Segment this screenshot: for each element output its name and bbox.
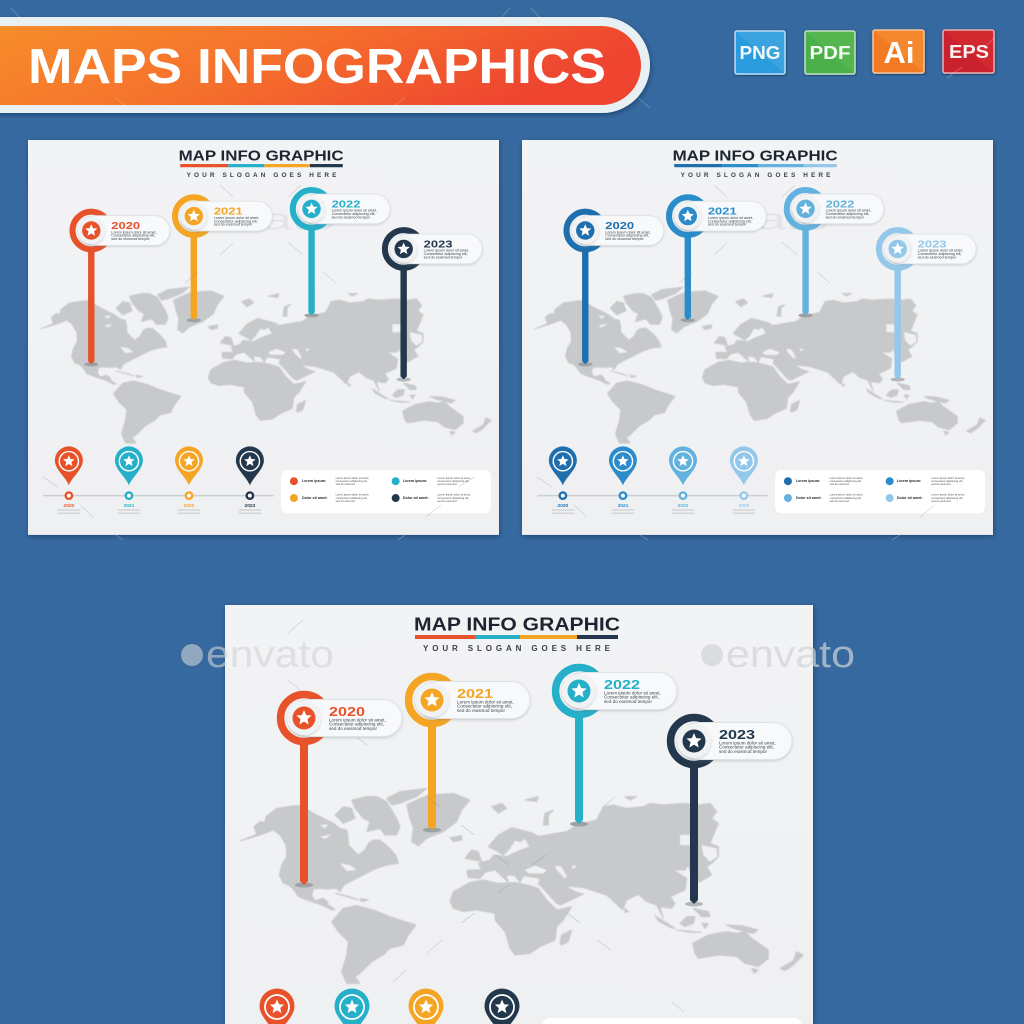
pin 2023 — [385, 230, 482, 382]
legend — [775, 470, 985, 513]
legend: Dolor sit amet: — [897, 496, 923, 500]
pin 2020: Lorem ipsum dolor sit amet, — [111, 230, 157, 234]
pin 2021: Lorem ipsum dolor sit amet, — [214, 216, 259, 220]
pin 2023: sed do eiusmod tempor — [719, 749, 767, 754]
world map — [40, 287, 491, 443]
world map — [240, 788, 803, 983]
pin 2023: 2023 — [424, 239, 453, 250]
legend: sed do eiusmod — [437, 499, 457, 503]
pin 2021: Lorem ipsum dolor sit amet, — [708, 216, 753, 220]
pin 2021: sed do eiusmod tempor — [708, 223, 747, 227]
legend: Lorem ipsum: — [897, 479, 921, 483]
pin 2021 — [175, 197, 272, 322]
legend: sed do eiusmod — [830, 499, 849, 503]
pin 2023: sed do eiusmod tempor — [424, 255, 463, 259]
title banner: MAPS INFOGRAPHICS — [28, 40, 606, 94]
heading — [673, 148, 838, 179]
pin 2023: Lorem ipsum dolor sit amet, — [719, 740, 776, 746]
bottom location pins — [260, 988, 520, 1024]
pin 2020: Consectetur adipiscing elit, — [605, 234, 649, 238]
heading — [414, 614, 620, 653]
pin 2023: 2023 — [719, 727, 755, 742]
pin 2021 — [669, 197, 766, 322]
pin 2021: 2021 — [708, 206, 737, 217]
faint watermark: envato — [673, 203, 830, 237]
pin 2020: 2020 — [605, 221, 634, 232]
pin 2021: sed do eiusmod tempor — [214, 223, 253, 227]
timeline: 2021 — [618, 503, 629, 509]
legend: Lorem ipsum dolor sit amet, — [931, 476, 965, 480]
pin 2023: Lorem ipsum dolor sit amet, — [424, 249, 469, 253]
legend: Dolor sit amet: — [302, 496, 328, 500]
legend: sed do eiusmod — [931, 482, 951, 486]
pin 2022: 2022 — [604, 677, 640, 692]
pin 2021: Consectetur adipiscing elit, — [708, 219, 752, 223]
legend: consectetur adipiscing elit, — [336, 496, 368, 500]
pin 2022: Lorem ipsum dolor sit amet, — [826, 209, 871, 213]
legend: Lorem ipsum: — [302, 479, 326, 483]
icon: PDF format — [805, 31, 855, 74]
legend: Lorem ipsum dolor sit amet, — [931, 493, 965, 497]
legend: consectetur adipiscing elit, — [437, 496, 469, 500]
panel: colour variant bottom centre — [225, 605, 813, 1024]
pin 2021: 2021 — [457, 686, 493, 701]
legend: consectetur adipiscing elit, — [830, 496, 862, 500]
timeline: 2023 — [245, 503, 256, 509]
panel: colour variant top left — [28, 140, 499, 535]
pin 2020: Consectetur adipiscing elit, — [329, 722, 384, 727]
pin 2022: sed do eiusmod tempor — [332, 215, 371, 219]
legend — [281, 470, 491, 513]
pin 2022 — [556, 668, 677, 826]
legend: Lorem ipsum dolor sit amet, — [437, 493, 471, 497]
pin 2020 — [567, 212, 664, 366]
heading — [179, 148, 344, 179]
pin 2022: Consectetur adipiscing elit, — [826, 212, 869, 216]
panel: blue variant top right — [522, 140, 993, 535]
pin 2022: Consectetur adipiscing elit, — [332, 212, 375, 216]
legend: sed do eiusmod — [931, 499, 951, 503]
pin 2022: 2022 — [826, 199, 855, 210]
pin 2022 — [293, 190, 390, 317]
pin 2022: sed do eiusmod tempor — [826, 215, 865, 219]
heading: MAP INFO GRAPHIC — [414, 614, 620, 634]
icon: PNG format: PNG — [740, 43, 780, 63]
pin 2022 — [787, 190, 884, 317]
icon: PDF format: PDF — [810, 43, 851, 63]
watermark right: envato — [726, 634, 855, 676]
pin 2020: Lorem ipsum dolor sit amet, — [605, 230, 651, 234]
pin 2021: Consectetur adipiscing elit, — [214, 219, 258, 223]
legend: sed do eiusmod — [336, 482, 355, 486]
pin 2021: sed do eiusmod tempor — [457, 708, 505, 713]
timeline — [537, 446, 768, 514]
legend: Lorem ipsum dolor sit amet, — [830, 493, 863, 497]
pin 2020: 2020 — [329, 704, 365, 719]
legend: sed do eiusmod — [437, 482, 457, 486]
pin 2023: sed do eiusmod tempor — [918, 255, 957, 259]
heading: YOUR SLOGAN GOES HERE — [681, 172, 831, 179]
legend: sed do eiusmod — [830, 482, 849, 486]
timeline: 2022 — [184, 503, 195, 509]
pin 2021: Lorem ipsum dolor sit amet, — [457, 700, 514, 704]
pin 2021 — [409, 676, 530, 832]
pin 2020 — [281, 694, 402, 888]
faint watermark: envato — [179, 203, 336, 237]
pin 2023: Lorem ipsum dolor sit amet, — [918, 249, 963, 253]
legend: Dolor sit amet: — [403, 496, 429, 500]
legend: Lorem ipsum dolor sit amet, — [437, 476, 471, 480]
pin 2022: Lorem ipsum dolor sit amet, — [604, 690, 661, 696]
legend: Lorem ipsum: — [403, 479, 427, 483]
timeline: 2023 — [739, 503, 750, 509]
icon: Ai format: Ai — [884, 35, 914, 70]
pin 2023: 2023 — [918, 239, 947, 250]
icon: EPS format — [943, 30, 994, 73]
legend: Lorem ipsum dolor sit amet, — [830, 476, 863, 480]
legend: Lorem ipsum: — [796, 479, 820, 483]
timeline — [43, 446, 274, 514]
pin 2023: Consectetur adipiscing elit, — [719, 745, 774, 750]
legend: consectetur adipiscing elit, — [830, 479, 862, 483]
pin 2022: 2022 — [332, 199, 361, 210]
pin 2021: 2021 — [214, 206, 243, 217]
legend: consectetur adipiscing elit, — [336, 479, 368, 483]
legend: Dolor sit amet: — [796, 496, 822, 500]
pin 2020: Consectetur adipiscing elit, — [111, 234, 155, 238]
watermark left: envato — [206, 634, 334, 676]
pin 2023 — [879, 230, 976, 382]
timeline: 2021 — [124, 503, 135, 509]
pin 2020: Lorem ipsum dolor sit amet, — [329, 718, 386, 722]
pin 2023 — [671, 718, 792, 906]
legend: Lorem ipsum dolor sit amet, — [336, 493, 369, 497]
heading: YOUR SLOGAN GOES HERE — [423, 644, 611, 653]
icon: EPS format: EPS — [949, 42, 989, 62]
pin 2020: sed do eiusmod tempor — [329, 726, 377, 731]
legend: sed do eiusmod — [336, 499, 355, 503]
pin 2022: Consectetur adipiscing elit, — [604, 695, 659, 700]
legend card — [542, 1018, 802, 1024]
timeline: 2020 — [558, 503, 569, 509]
pin 2023: Consectetur adipiscing elit, — [918, 252, 962, 256]
icon: PNG format — [735, 31, 785, 74]
timeline: 2020 — [64, 503, 75, 509]
world map — [534, 287, 985, 443]
legend: consectetur adipiscing elit, — [931, 479, 963, 483]
heading: YOUR SLOGAN GOES HERE — [187, 172, 337, 179]
pin 2020: sed do eiusmod tempor — [605, 237, 644, 241]
heading: MAP INFO GRAPHIC — [673, 148, 838, 164]
pin 2022: sed do eiusmod tempor — [604, 699, 652, 704]
title banner — [0, 17, 650, 113]
pin 2021: Consectetur adipiscing elit, — [457, 704, 512, 709]
pin 2023: Consectetur adipiscing elit, — [424, 252, 468, 256]
pin 2020: 2020 — [111, 221, 140, 232]
legend: consectetur adipiscing elit, — [437, 479, 469, 483]
timeline: 2022 — [678, 503, 689, 509]
legend: Lorem ipsum dolor sit amet, — [336, 476, 369, 480]
legend: consectetur adipiscing elit, — [931, 496, 963, 500]
pin 2022: Lorem ipsum dolor sit amet, — [332, 209, 377, 213]
pin 2020 — [73, 212, 170, 366]
heading: MAP INFO GRAPHIC — [179, 148, 344, 164]
icon: Ai format — [873, 30, 924, 73]
pin 2020: sed do eiusmod tempor — [111, 237, 150, 241]
